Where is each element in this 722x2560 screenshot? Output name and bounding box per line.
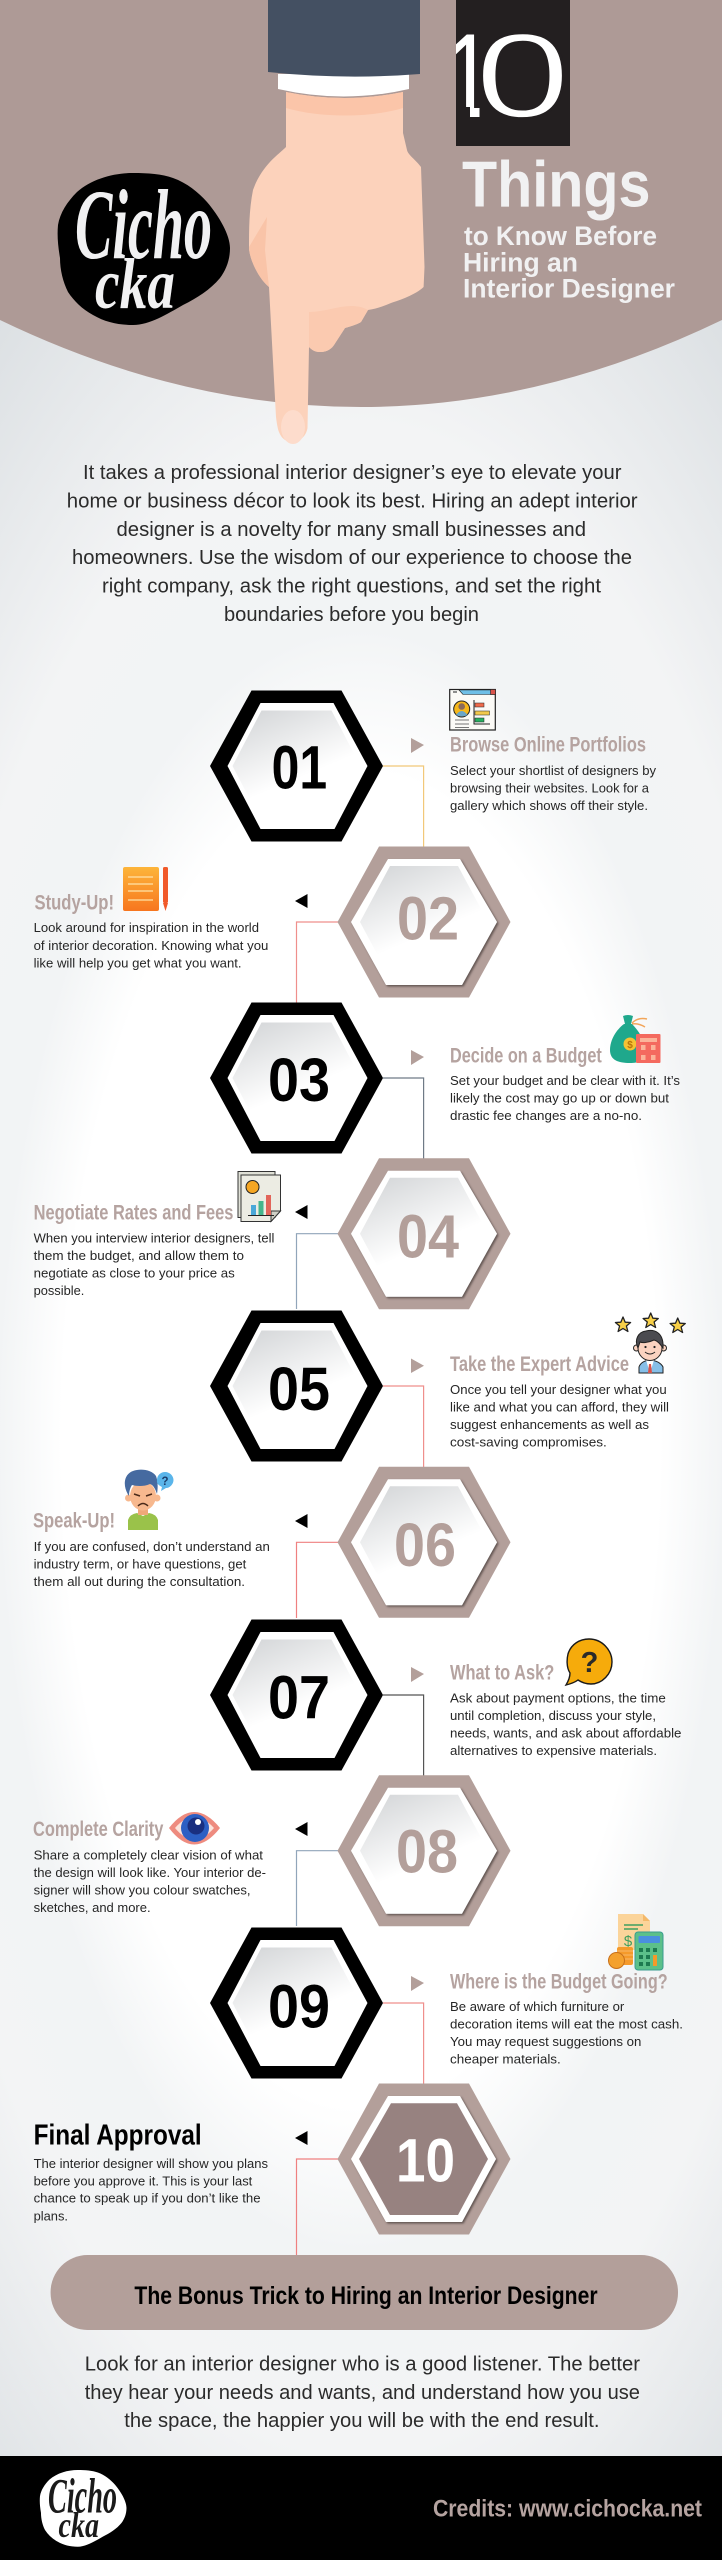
heading: Complete Clarity — [33, 1818, 164, 1841]
body: negotiate as close to your price as — [34, 1265, 235, 1280]
icon: question speech bubble — [566, 1639, 612, 1685]
hand — [249, 92, 424, 442]
shirt cuff — [278, 74, 409, 96]
body: cheaper materials. — [450, 2051, 561, 2066]
body: the design will look like. Your interior de- — [34, 1865, 266, 1880]
connector lines — [296, 766, 424, 2255]
step 05 — [210, 1310, 685, 1462]
palm shading — [249, 217, 269, 287]
body: The interior designer will show you plans — [34, 2156, 268, 2171]
icon: receipt, coins and calculator: $ — [624, 1933, 633, 1950]
step 07 — [210, 1620, 681, 1770]
arrow — [295, 1205, 308, 1219]
icon: eye — [169, 1812, 220, 1844]
jacket sleeve — [268, 0, 420, 77]
arrow — [411, 1667, 424, 1682]
body: industry term, or have questions, get — [34, 1557, 247, 1572]
intro paragraph — [67, 461, 638, 626]
hexagon 05 — [210, 1310, 383, 1462]
body — [450, 1690, 681, 1758]
body: Ask about payment options, the time — [450, 1690, 666, 1705]
closing paragraph: they hear your needs and wants, and understand how you use — [85, 2381, 640, 2404]
hexagon 10 — [338, 2084, 510, 2234]
body: suggest enhancements as well as — [450, 1417, 649, 1432]
body: decoration items will eat the most cash. — [450, 2016, 683, 2031]
body: chance to speak up if you don’t like the — [34, 2191, 261, 2206]
icon: money bag and calculator: $ — [627, 1040, 633, 1051]
hexagon 06: 06 — [394, 1511, 456, 1579]
footer logo — [40, 2468, 126, 2547]
body: them all out during the consultation. — [34, 1574, 245, 1589]
arrow — [411, 1050, 424, 1065]
body — [34, 1230, 275, 1298]
arrow — [295, 2131, 308, 2145]
icon: money bag and calculator — [610, 1015, 660, 1063]
black box with 10: 1 — [444, 9, 494, 143]
step 01 — [210, 690, 656, 842]
logo: Cichocka blob: Cicho — [75, 169, 212, 280]
body: possible. — [34, 1283, 84, 1298]
heading words: Things — [462, 148, 650, 221]
body: Set your budget and be clear with it. It’s — [450, 1073, 680, 1088]
heading: Decide on a Budget — [450, 1044, 602, 1067]
body: You may request suggestions on — [450, 2034, 641, 2049]
body — [450, 1999, 683, 2066]
icon: confused man: ? — [161, 1476, 169, 1488]
intro paragraph: designer is a novelty for many small businesses and — [116, 518, 586, 541]
closing paragraph — [85, 2353, 640, 2432]
body: before you approve it. This is your last — [34, 2174, 253, 2189]
black box with 10 — [444, 0, 570, 146]
pointing hand illustration — [249, 0, 424, 444]
closing paragraph: Look for an interior designer who is a good listener. The better — [85, 2353, 640, 2376]
hexagon 06 — [338, 1467, 510, 1618]
step 06 — [33, 1467, 510, 1618]
body: browsing their websites. Look for a — [450, 781, 650, 796]
body — [34, 1847, 266, 1915]
body — [34, 1539, 270, 1589]
bonus pill banner: The Bonus Trick to Hiring an Interior Designer — [134, 2282, 598, 2310]
intro paragraph: boundaries before you begin — [224, 603, 479, 626]
black box with 10: 0 — [475, 9, 570, 143]
body — [450, 763, 656, 813]
icon: financial report — [238, 1172, 280, 1222]
body — [450, 1382, 669, 1449]
body: sketches, and more. — [34, 1900, 151, 1915]
logo: Cichocka blob — [58, 169, 230, 325]
hexagon 02: 02 — [397, 884, 459, 952]
arrow — [411, 738, 424, 753]
body: Be aware of which furniture or — [450, 1999, 625, 2014]
step 08 — [33, 1775, 510, 1926]
hexagon 01 — [210, 690, 383, 842]
icon: portfolio browser window — [450, 690, 496, 730]
hexagon 09 — [210, 1928, 383, 2078]
heading: Speak-Up! — [33, 1510, 115, 1533]
hexagon 03: 03 — [268, 1046, 330, 1114]
hexagon 10: 10 — [396, 2127, 455, 2195]
curled fingers shading — [309, 306, 368, 352]
heading: Final Approval — [34, 2119, 202, 2151]
fingernail — [281, 410, 305, 444]
body: Select your shortlist of designers by — [450, 763, 656, 778]
step 03 — [210, 1002, 680, 1154]
hexagon 07: 07 — [268, 1663, 330, 1731]
body: likely the cost may go up or down but — [450, 1091, 669, 1106]
body: gallery which shows off their style. — [450, 798, 648, 813]
body: until completion, discuss your style, — [450, 1708, 656, 1723]
body — [34, 920, 268, 970]
header arch — [0, 0, 722, 407]
heading words: Hiring an — [463, 248, 578, 278]
closing paragraph: the space, the happier you will be with the end result. — [124, 2409, 600, 2432]
step 02 — [34, 846, 510, 998]
arrow — [295, 1514, 308, 1528]
intro paragraph: homeowners. Use the wisdom of our experience to choose the — [72, 546, 632, 569]
step 04 — [34, 1158, 510, 1309]
hexagon 08: 08 — [396, 1818, 458, 1886]
heading words: Interior Designer — [463, 274, 675, 304]
wrist shadow — [286, 92, 403, 116]
hexagon 09: 09 — [268, 1972, 330, 2040]
body: them the budget, and allow them to — [34, 1248, 244, 1263]
arrow — [411, 1976, 424, 1991]
body: plans. — [34, 2209, 68, 2224]
body: Look around for inspiration in the world — [34, 920, 259, 935]
arrow — [411, 1358, 424, 1373]
body: alternatives to expensive materials. — [450, 1743, 657, 1758]
body: When you interview interior designers, tell — [34, 1230, 275, 1245]
hexagon 02 — [338, 846, 510, 998]
body: of interior decoration. Knowing what you — [34, 938, 268, 953]
heading words: to Know Before — [464, 221, 657, 251]
body: needs, wants, and ask about affordable — [450, 1725, 681, 1740]
arrow — [295, 894, 308, 908]
step 10 — [34, 2084, 510, 2234]
body — [34, 2156, 268, 2224]
body: drastic fee changes are a no-no. — [450, 1108, 642, 1123]
heading: Take the Expert Advice — [450, 1353, 629, 1376]
heading: Study-Up! — [34, 892, 114, 914]
icon: receipt, coins and calculator — [608, 1914, 663, 1970]
hexagon 01: 01 — [272, 733, 327, 801]
hexagon 04: 04 — [397, 1203, 459, 1271]
title block — [444, 0, 675, 304]
body — [450, 1073, 680, 1123]
heading words — [462, 148, 675, 304]
body: Share a completely clear vision of what — [34, 1847, 263, 1862]
footer logo: Cicho — [48, 2468, 117, 2524]
hexagon 03 — [210, 1002, 383, 1154]
body: cost-saving compromises. — [450, 1434, 607, 1449]
intro paragraph: home or business décor to look its best. Hiring an adept interior — [67, 489, 638, 512]
heading: Browse Online Portfolios — [450, 734, 646, 757]
logo: Cichocka blob: cka — [95, 244, 175, 324]
body: Once you tell your designer what you — [450, 1382, 667, 1397]
intro paragraph: It takes a professional interior designer’s eye to elevate your — [83, 461, 622, 484]
heading: Negotiate Rates and Fees — [34, 1201, 233, 1224]
hexagon 08 — [338, 1775, 510, 1926]
bonus pill banner — [51, 2255, 678, 2330]
body: If you are confused, don’t understand an — [34, 1539, 270, 1554]
body: signer will show you colour swatches, — [34, 1883, 250, 1898]
hexagon 04 — [338, 1158, 510, 1309]
heading: What to Ask? — [450, 1661, 554, 1684]
step 09 — [210, 1914, 683, 2078]
body: like and what you can afford, they will — [450, 1399, 669, 1414]
arrow — [295, 1822, 308, 1836]
hexagon 05: 05 — [268, 1355, 330, 1423]
intro paragraph: right company, ask the right questions, and set the right — [102, 575, 601, 598]
icon: confused man — [125, 1470, 174, 1530]
icon: notebook and pencil — [123, 867, 168, 911]
hexagon 07 — [210, 1620, 383, 1770]
icon: expert with stars — [615, 1313, 685, 1373]
footer logo: cka — [58, 2505, 99, 2545]
footer bar — [0, 2456, 722, 2560]
body: like will help you get what you want. — [34, 955, 242, 970]
icon: question speech bubble: ? — [581, 1647, 598, 1679]
